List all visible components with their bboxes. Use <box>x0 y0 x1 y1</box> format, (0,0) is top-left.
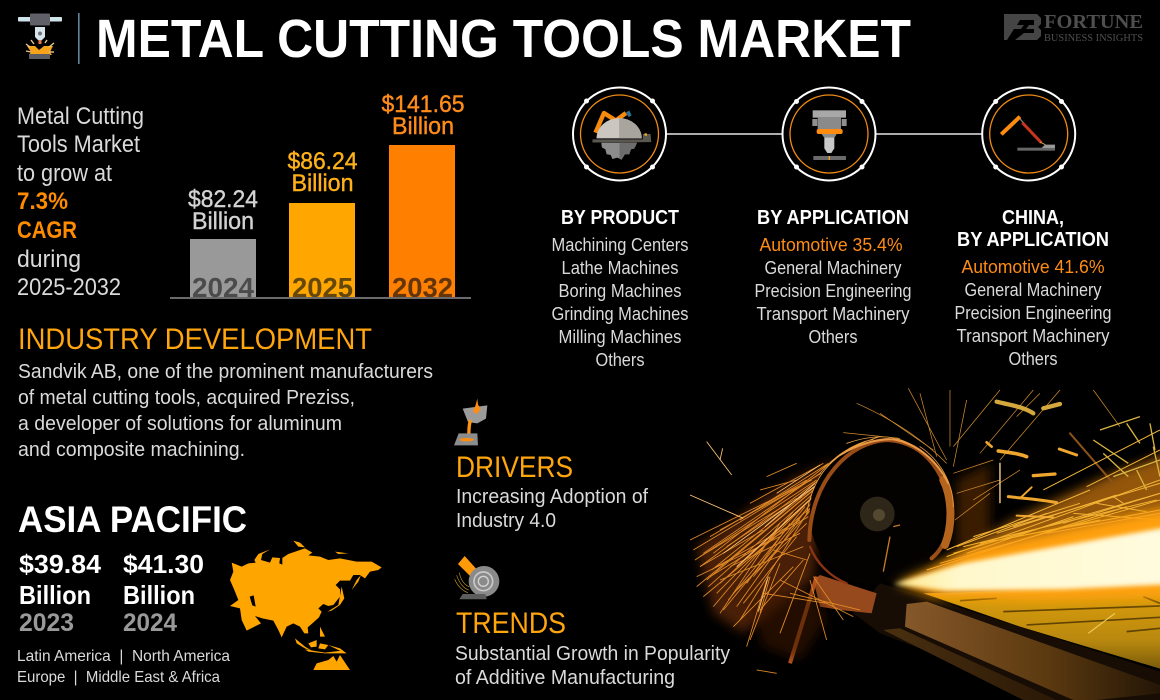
logo: Fortune Business Insights <box>1004 11 1143 44</box>
bar 2024: Billion <box>192 208 254 235</box>
text: industry development: Sandvik AB, one of the prominent manufacturers <box>18 361 433 383</box>
bar 2032: 2032 <box>392 272 453 303</box>
right spray glow <box>933 447 1160 570</box>
logo: Fortune Business Insights: BUSINESS INSIGHTS <box>1044 32 1143 44</box>
plate streaks <box>960 597 1160 632</box>
icon: saw in ring <box>573 88 666 180</box>
heading: Asia Pacific: ASIA PACIFIC <box>18 499 247 540</box>
segment: China by application: BY APPLICATION <box>957 229 1109 251</box>
text: growth summary: CAGR <box>17 217 77 244</box>
stat: 2024: $41.30 <box>123 549 204 579</box>
segment: China by application: CHINA, <box>1002 207 1064 229</box>
segment: China by application: Automotive 41.6% <box>962 257 1104 277</box>
stat: 2023: Billion <box>19 580 91 610</box>
text: other regions: Latin America | North America <box>17 648 230 665</box>
bar 2032: $141.65 <box>382 91 464 118</box>
text: growth summary: Metal Cutting <box>17 103 144 130</box>
icon: laser cutter <box>18 14 62 59</box>
segment: by product: Milling Machines <box>558 327 682 347</box>
text: trends: Substantial Growth in Popularity <box>455 643 730 665</box>
embers <box>987 402 1113 517</box>
logo: Fortune Business Insights: FORTUNE <box>1044 11 1143 33</box>
segment: by application: Others <box>808 327 858 347</box>
bar chart: market size <box>170 91 471 303</box>
sparks: top spray <box>843 388 1120 520</box>
text: drivers: Increasing Adoption of <box>456 486 648 508</box>
segment: China by application <box>954 207 1112 369</box>
stat: 2023 <box>19 549 102 637</box>
bar 2025: Billion <box>292 170 354 197</box>
segment: by product: Others <box>596 350 644 370</box>
stat: 2024: Billion <box>123 580 195 610</box>
metal plate <box>923 587 1160 677</box>
left fan glow <box>697 460 837 633</box>
segment: by application <box>754 207 912 347</box>
stat: 2023: $39.84 <box>19 549 102 579</box>
connector lines <box>666 133 982 135</box>
icon: grinder <box>455 556 499 599</box>
sparks: right spray <box>927 430 1160 570</box>
metal bar lit face <box>905 602 1160 700</box>
title divider <box>78 13 80 64</box>
chart axis <box>170 297 471 299</box>
text: growth summary: during <box>17 246 81 273</box>
segment: by product: BY PRODUCT <box>561 207 679 229</box>
stat: 2024 <box>123 549 204 637</box>
text: trends <box>455 643 730 689</box>
text: industry development: a developer of solutions for aluminum <box>18 413 342 435</box>
segment: China by application: Transport Machinery <box>956 326 1110 346</box>
metal bar dark face <box>853 583 1160 700</box>
bar 2032 <box>382 91 464 303</box>
segment: by application: Precision Engineering <box>754 281 912 301</box>
icon: welding torch in ring <box>982 88 1075 180</box>
segment: by application: Automotive 35.4% <box>760 235 902 255</box>
icon: pouring crucible <box>454 399 487 445</box>
bar 2025: 2025 <box>292 272 353 303</box>
spark jet glow <box>897 503 1160 600</box>
text: trends: of Additive Manufacturing <box>455 667 675 689</box>
spark jet core <box>893 523 1160 591</box>
workpiece under wheel <box>813 575 877 613</box>
text: growth summary: to grow at <box>17 160 112 187</box>
text: growth summary <box>17 103 144 301</box>
photo: angle grinder cutting metal with sparks <box>690 388 1160 700</box>
bar 2025 <box>288 148 358 303</box>
segment: China by application: Precision Engineering <box>954 303 1112 323</box>
segment: by product: Lathe Machines <box>562 258 678 278</box>
stat: 2024: 2024 <box>123 609 177 637</box>
heading: drivers: DRIVERS <box>456 451 573 484</box>
wheel disc <box>796 427 957 597</box>
segment: by product: Machining Centers <box>552 235 688 255</box>
sparks: top right tangle <box>1093 417 1160 490</box>
bar 2024 <box>188 186 258 303</box>
segment: China by application: General Machinery <box>964 280 1102 300</box>
map: Asia Pacific <box>230 541 382 670</box>
segment: by application: BY APPLICATION <box>757 207 909 229</box>
bar 2024: 2024 <box>192 272 254 303</box>
bar 2032: Billion <box>392 113 454 140</box>
text: growth summary: 7.3% <box>17 188 68 215</box>
wheel hub <box>860 497 895 531</box>
segment: by product: Boring Machines <box>558 281 682 301</box>
title: METAL CUTTING TOOLS MARKET <box>96 9 911 69</box>
heading: industry development: INDUSTRY DEVELOPMENT <box>18 323 372 356</box>
heading: trends: TRENDS <box>456 607 566 640</box>
icon: laser head in ring <box>782 88 876 180</box>
segment: by application: Transport Machinery <box>756 304 910 324</box>
text: industry development <box>18 361 433 461</box>
segment: China by application: Others <box>1008 349 1058 369</box>
text: growth summary: Tools Market <box>17 131 140 158</box>
text: growth summary: 2025-2032 <box>17 274 121 301</box>
segment: by application: General Machinery <box>764 258 902 278</box>
upper brown haze <box>957 463 990 550</box>
sparks: left fan <box>690 460 860 673</box>
text: drivers <box>456 486 648 532</box>
text: other regions <box>17 648 230 686</box>
text: industry development: and composite machining. <box>18 439 245 461</box>
stat: 2023: 2023 <box>19 609 74 637</box>
bar 2025: $86.24 <box>288 148 358 175</box>
metal bar lower strip <box>883 628 1057 700</box>
text: drivers: Industry 4.0 <box>456 510 556 532</box>
segment: by product: Grinding Machines <box>552 304 688 324</box>
wheel rim sparks <box>807 437 953 583</box>
text: other regions: Europe | Middle East & Africa <box>17 669 220 686</box>
text: industry development: of metal cutting tools, acquired Preziss, <box>18 387 355 409</box>
segment: by product <box>552 207 688 370</box>
bar 2024: $82.24 <box>188 186 258 213</box>
